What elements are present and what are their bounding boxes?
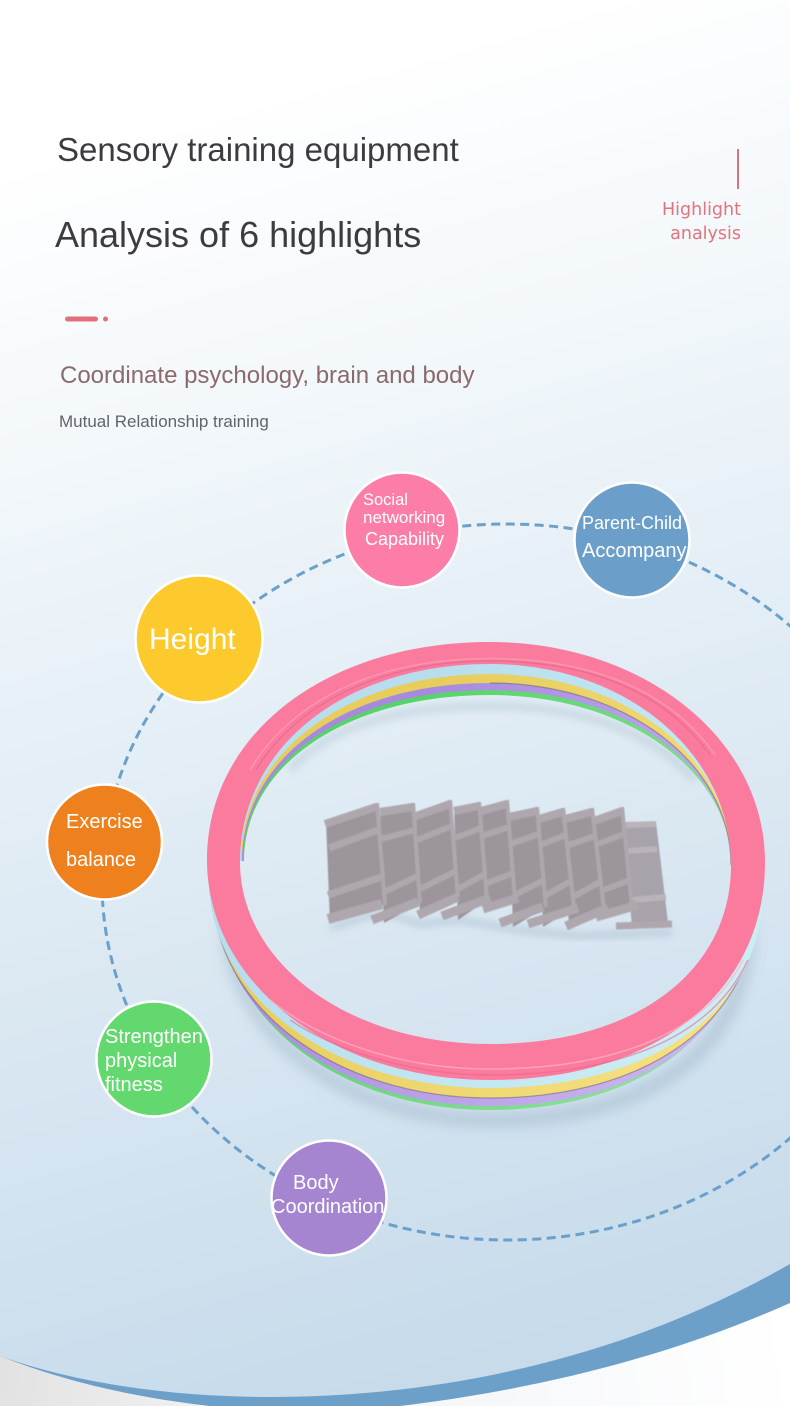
circle: height: Height — [149, 623, 236, 656]
bottom wave — [0, 1264, 790, 1406]
circle: strengthen physical fitness: fitness — [105, 1074, 163, 1096]
hoop inner shadow — [290, 706, 695, 780]
circle: body coordination: Coordination — [271, 1196, 384, 1218]
purple hoop — [216, 653, 752, 1106]
circle: body coordination: Body — [293, 1172, 339, 1194]
dark seam lines — [213, 683, 757, 1098]
highlight analysis tag — [662, 149, 741, 244]
title line 1: Sensory training equipment — [57, 131, 459, 168]
grey sensory blocks — [325, 800, 672, 936]
yellow hoop — [213, 653, 757, 1098]
grey corner — [0, 1356, 210, 1406]
block 6 — [500, 807, 546, 927]
green hoop — [220, 653, 748, 1110]
circle: social networking capability: Social — [363, 491, 408, 509]
circle: social networking capability: Capability — [365, 529, 444, 549]
highlight analysis tag: analysis — [670, 224, 741, 244]
circle: parent-child accompany: Parent-Child — [582, 513, 682, 533]
dashed orbit — [102, 524, 790, 1240]
blocks shadow — [330, 912, 672, 936]
subtitle: Coordinate psychology, brain and body — [60, 362, 474, 389]
block 3 — [416, 800, 458, 917]
pink hoop highlights — [250, 658, 748, 1075]
circle: social networking capability: networking — [363, 508, 445, 527]
block 9 — [594, 807, 638, 920]
highlight analysis tag: Highlight — [662, 200, 741, 220]
circle: body coordination — [271, 1140, 386, 1256]
hoop outer shadow — [228, 925, 748, 1120]
pink hoop — [207, 642, 765, 1080]
block 1 — [325, 803, 385, 923]
circle: height — [136, 576, 262, 702]
block 4 — [442, 802, 490, 920]
blue band — [0, 1264, 790, 1406]
title line 2: Analysis of 6 highlights — [55, 214, 421, 255]
block 2 — [372, 803, 420, 923]
hoop stack — [207, 642, 765, 1120]
circle: exercise balance: balance — [66, 849, 136, 871]
circle: exercise balance: Exercise — [66, 811, 143, 833]
block 8 — [565, 808, 608, 930]
circle: strengthen physical fitness: Strengthen — [105, 1026, 203, 1048]
circle: parent-child accompany: Accompany — [582, 540, 686, 562]
circle: social networking capability — [344, 472, 460, 588]
white corner — [400, 1303, 790, 1406]
block 5 — [481, 800, 518, 913]
light blue hoop — [209, 653, 763, 1088]
block 10 — [616, 822, 672, 928]
circle: exercise balance — [47, 784, 162, 900]
description: Mutual Relationship training — [59, 412, 269, 431]
circle: parent-child accompany — [574, 482, 690, 598]
block 7 — [528, 808, 578, 927]
circle: strengthen physical fitness — [96, 1002, 212, 1116]
circle: strengthen physical fitness: physical — [105, 1050, 177, 1072]
accent dash — [65, 316, 108, 322]
